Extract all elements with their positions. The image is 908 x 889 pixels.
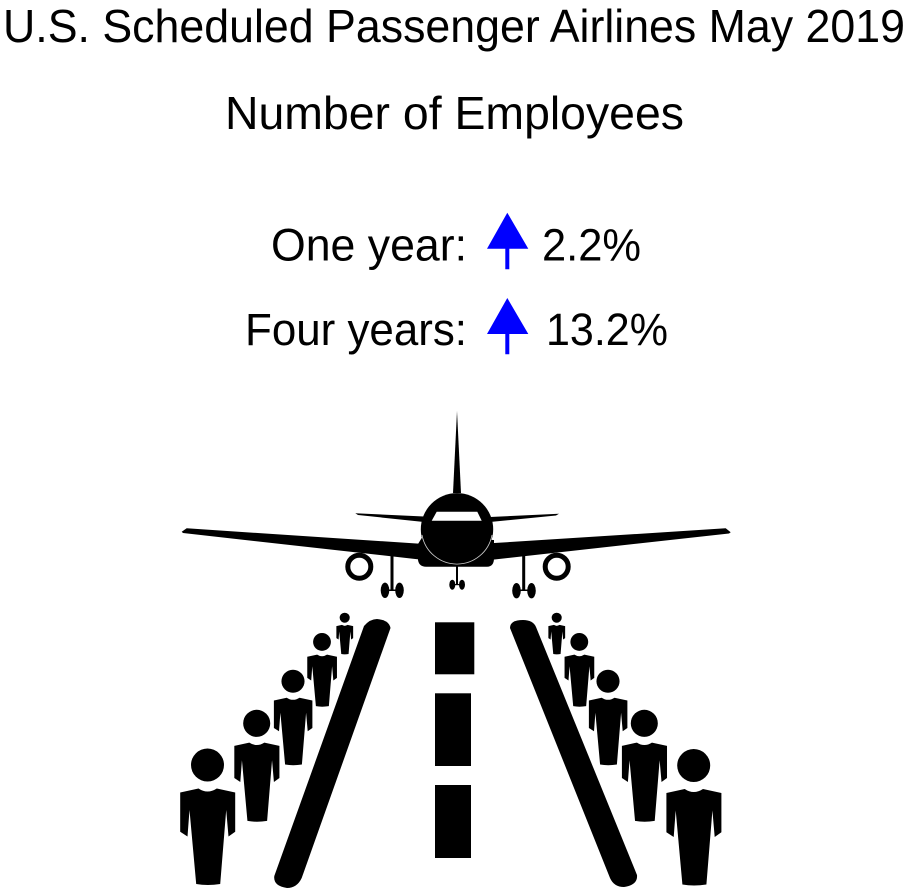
stat: four years change: 13.2% [546, 304, 668, 355]
people: right line [548, 613, 721, 886]
people: left line [180, 613, 353, 885]
stat: four years change: Four years: [245, 304, 467, 355]
airplane [182, 411, 731, 598]
stat: one year change [271, 213, 641, 270]
title: U.S. Scheduled Passenger Airlines May 2019 [3, 0, 905, 52]
runway left edge [274, 619, 390, 888]
stat: four years change [245, 298, 668, 355]
title [3, 0, 905, 139]
runway right edge [510, 620, 637, 887]
stat: one year change: 2.2% [542, 220, 641, 270]
stat: one year change: One year: [271, 220, 467, 270]
runway center line [435, 622, 474, 858]
title: Number of Employees [225, 87, 684, 139]
